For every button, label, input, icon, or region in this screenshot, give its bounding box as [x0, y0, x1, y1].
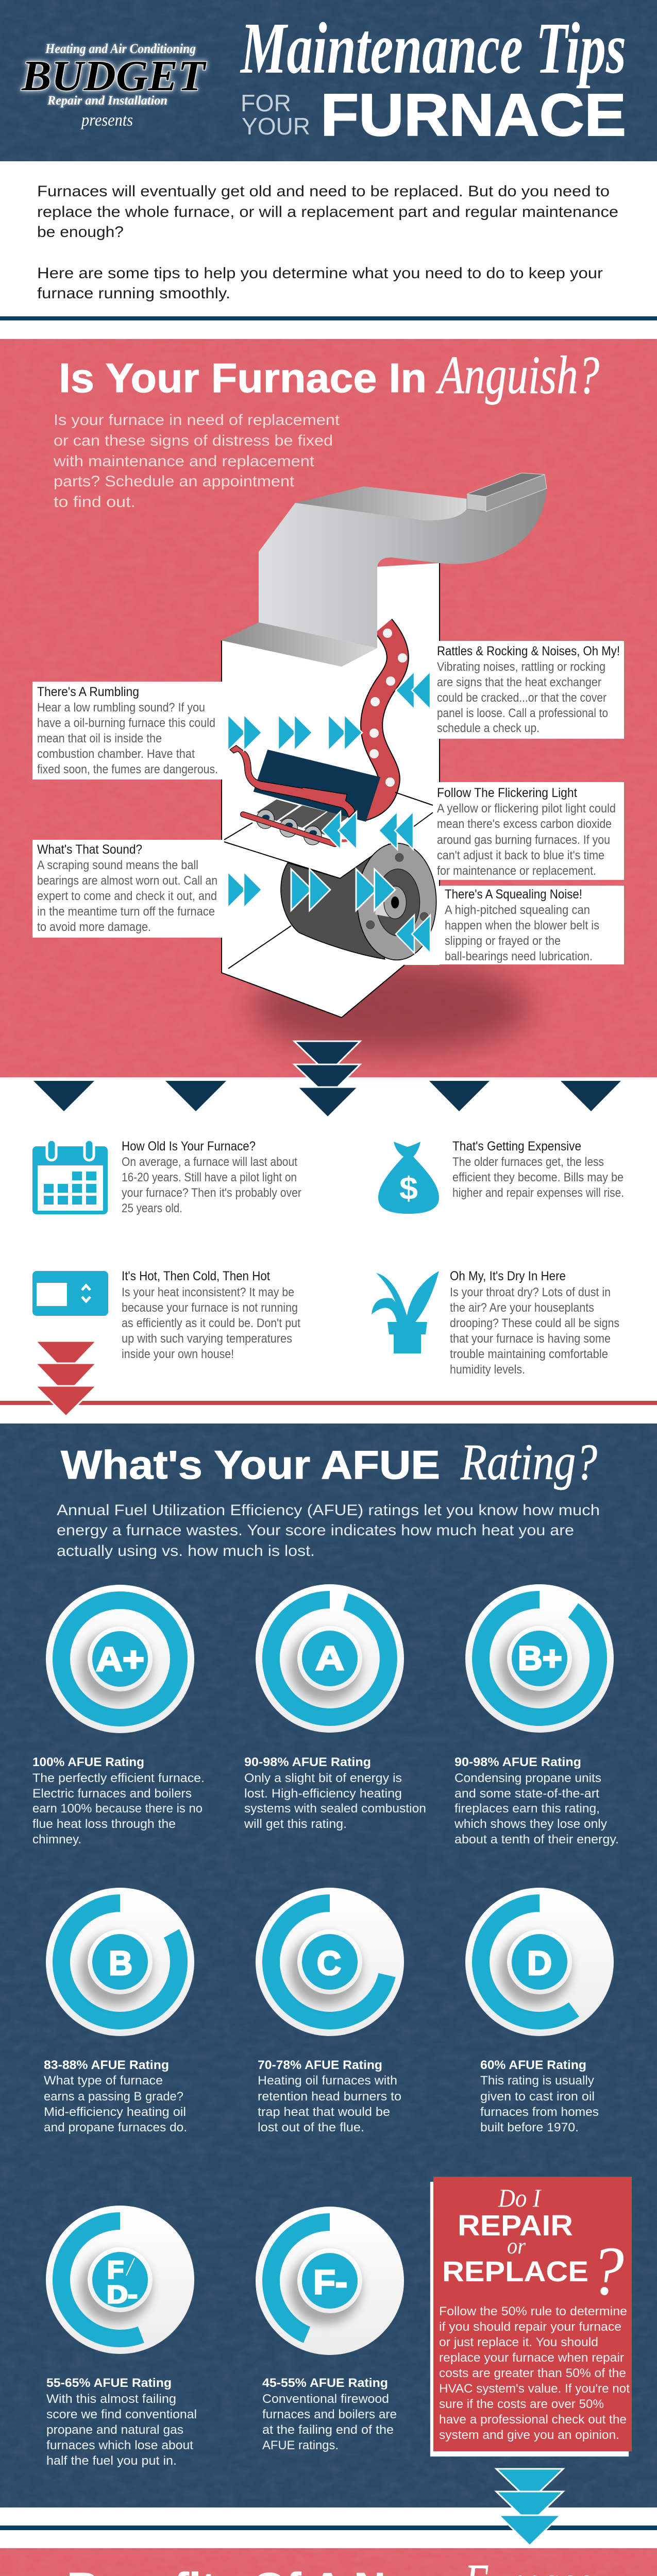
rating: 45-55: at the failing end of the	[262, 2423, 394, 2437]
rating: 100%: Electric furnaces and boilers	[32, 1787, 192, 1801]
callout heading: REPAIR	[458, 2209, 573, 2242]
title: YOUR	[242, 113, 310, 140]
rating: 70-78: trap heat that would be	[258, 2105, 390, 2119]
rating: 60: built before 1970.	[480, 2121, 579, 2134]
callout: rattles and rocking: Vibrating noises, rattling or rocking	[437, 660, 605, 674]
callout body: HVAC system's value. If you're not	[439, 2382, 630, 2396]
rating: 90-98 A: lost. High-efficiency heating	[244, 1787, 402, 1801]
icon: money bag: $	[399, 1171, 418, 1207]
rating: 45-55: AFUE ratings.	[262, 2438, 339, 2452]
arrows: diagram pointers	[228, 671, 430, 953]
rating: 55-65: furnaces which lose about	[46, 2438, 193, 2452]
callout: rattles and rocking: are signs that the heat exchanger	[437, 675, 601, 689]
icon: drooping plant	[372, 1271, 439, 1353]
intro text: furnace running smoothly.	[37, 285, 230, 302]
logo: Budget: Repair and Installation	[47, 94, 167, 108]
callout: rattles and rocking: panel is loose. Call a professional to	[437, 706, 608, 720]
arrow: centre triple chevron	[294, 1041, 360, 1117]
rating: 90-98 A: Only a slight bit of energy is	[244, 1771, 402, 1785]
callout: flickering light: for maintenance or replacement.	[437, 864, 596, 878]
rating: 83-88: earns a passing B grade?	[44, 2090, 183, 2104]
rating: 90-98 B+	[454, 1755, 619, 1846]
rating: 90-98 A: will get this rating.	[244, 1817, 347, 1831]
intro text: Here are some tips to help you determine what you need to do to keep your	[37, 265, 603, 282]
icon: money bag	[378, 1142, 439, 1214]
callout: squealing noise: slipping or frayed or the	[445, 934, 561, 948]
text: hot then cold	[122, 1269, 300, 1361]
arrows: top row navy triangles	[33, 1081, 621, 1111]
rating: 83-88: and propane furnaces do.	[44, 2121, 187, 2134]
gauge: B+: B+	[518, 1639, 562, 1677]
callout: rattles and rocking: schedule a check up.	[437, 721, 540, 735]
gauge: F/D-: F	[107, 2257, 124, 2284]
callout: what's that sound: in the meantime turn off the furnace	[37, 905, 215, 919]
rating: 60: This rating is usually	[480, 2074, 594, 2088]
icon: thermostat	[32, 1271, 108, 1316]
text: how old: On average, a furnace will last about	[122, 1155, 297, 1169]
furnace diagram	[221, 473, 547, 1054]
gauge: C: C	[317, 1944, 341, 1982]
text: expensive: higher and repair expenses will rise.	[452, 1186, 624, 1200]
heading: benefits	[67, 2553, 593, 2576]
text: expensive: The older furnaces get, the less	[452, 1155, 604, 1169]
callout: repair or replace	[430, 2177, 632, 2456]
callout: rattles and rocking	[434, 641, 624, 739]
callout heading	[442, 2183, 624, 2310]
text: dry in here: that your furnace is having some	[450, 1332, 611, 1346]
text: dry in here: humidity levels.	[450, 1363, 525, 1377]
callout: what's that sound: bearings are almost worn out. Call an	[37, 874, 217, 888]
callout: squealing noise: ball-bearings need lubrication.	[445, 950, 593, 963]
logo: Budget	[21, 41, 207, 130]
text: expensive: efficient they become. Bills may be	[452, 1171, 624, 1184]
rating: 90-98 A	[244, 1755, 426, 1831]
rating: 100%: 100% AFUE Rating	[32, 1755, 144, 1769]
red duct pipe with dots	[363, 626, 407, 810]
intro text: replace the whole furnace, or will a replacement part and regular maintenance	[37, 204, 618, 221]
rating: 55-65: half the fuel you put in.	[46, 2454, 177, 2468]
text: dry in here	[450, 1269, 619, 1377]
rating: 45-55: Conventional firewood	[262, 2392, 389, 2406]
rating: 70-78: retention head burners to	[258, 2090, 401, 2104]
gauge: B: B	[109, 1944, 132, 1982]
callout: rattles and rocking: Rattles & Rocking & Noises, Oh My!	[437, 644, 620, 658]
rating: 55-65: score we find conventional	[46, 2408, 197, 2421]
gauge: F-	[256, 2207, 404, 2355]
title: FOR	[241, 90, 291, 116]
rating: 55-65: 55-65% AFUE Rating	[46, 2376, 172, 2390]
arrow: teal triple chevron	[496, 2469, 563, 2546]
rating: 45-55: furnaces and boilers are	[262, 2408, 397, 2421]
callout: rumbling: mean that oil is inside the	[37, 732, 162, 745]
text: how old: How Old Is Your Furnace?	[122, 1139, 256, 1154]
rating: 90-98 B+: 90-98% AFUE Rating	[454, 1755, 581, 1769]
text: hot then cold: as efficiently as it could be. Don't put	[122, 1316, 300, 1330]
blower motor	[281, 843, 436, 960]
text: hot then cold: Is your heat inconsistent? It may be	[122, 1285, 294, 1299]
panel: is your furnace in anguish	[0, 339, 657, 1077]
rating: 100%	[32, 1755, 205, 1846]
callout: flickering light: A yellow or flickering pilot light could	[437, 802, 616, 816]
rating: 90-98 B+: fireplaces earn this rating,	[454, 1802, 600, 1816]
heading: anguish	[59, 345, 599, 405]
AFUE intro text: Annual Fuel Utilization Efficiency (AFUE) ratings let you know how much	[57, 1502, 600, 1519]
callout body: costs are greater than 50% of the	[439, 2366, 626, 2380]
callout heading: ?	[591, 2233, 624, 2310]
callout: flickering light: Follow The Flickering Light	[437, 786, 577, 800]
text: expensive	[452, 1139, 624, 1200]
rating: 60	[480, 2058, 599, 2134]
text: how old	[122, 1139, 301, 1215]
rating: 83-88	[44, 2058, 187, 2134]
heading: AFUE: Rating?	[460, 1433, 597, 1490]
callout body: replace your furnace when repair	[439, 2351, 624, 2365]
rating: 55-65: With this almost failing	[46, 2392, 176, 2406]
title: FURNACE	[321, 81, 626, 148]
callout heading: REPLACE	[442, 2255, 588, 2287]
anguish intro text: or can these signs of distress be fixed	[54, 432, 333, 449]
text: dry in here: drooping? These could all be signs	[450, 1316, 619, 1330]
callout: rumbling: combustion chamber. Have that	[37, 747, 195, 761]
callout body: have a professional check out the	[439, 2413, 627, 2427]
rating: 100%: chimney.	[32, 1833, 81, 1846]
gauge: F/D-	[46, 2206, 194, 2354]
text: dry in here: the air? Are your houseplants	[450, 1301, 594, 1315]
callout body: if you should repair your furnace	[439, 2320, 621, 2334]
text: how old: 25 years old.	[122, 1201, 182, 1215]
rating: 70-78	[258, 2058, 401, 2134]
callout: rattles and rocking: could be cracked...or that the cover	[437, 691, 607, 705]
rating: 55-65: propane and natural gas	[46, 2423, 183, 2437]
callout: rumbling: There's A Rumbling	[37, 685, 139, 699]
rating: 60: 60% AFUE Rating	[480, 2058, 586, 2072]
gauge: A+: A+	[96, 1640, 144, 1678]
heat exchanger and burners	[230, 745, 380, 845]
rating: 90-98 B+: which shows they lose only	[454, 1817, 607, 1831]
intro text	[37, 183, 618, 302]
callout: rumbling: fixed soon, the fumes are dangerous.	[37, 762, 218, 776]
rating: 90-98 A: 90-98% AFUE Rating	[244, 1755, 371, 1769]
heading: anguish: Anguish?	[435, 345, 599, 405]
callout: flickering light: mean there's excess carbon dioxide	[437, 817, 612, 831]
logo: Budget: BUDGET	[21, 52, 207, 100]
callout: rumbling	[32, 682, 223, 779]
panel: AFUE rating	[0, 1423, 657, 2507]
gauge: C	[256, 1888, 404, 2036]
callout: squealing noise: A high-pitched squealing can	[445, 903, 590, 917]
callout body: sure if the costs are over 50%	[439, 2397, 604, 2411]
gauge: F/D-: D-	[107, 2281, 138, 2309]
rating: 70-78: 70-78% AFUE Rating	[258, 2058, 382, 2072]
gauge: B+	[465, 1584, 614, 1733]
text: dry in here: Is your throat dry? Lots of dust in	[450, 1285, 611, 1299]
rating: 70-78: Heating oil furnaces with	[258, 2074, 397, 2088]
rating: 100%: earn 100% because there is no	[32, 1802, 203, 1816]
arrow: red triple chevron	[36, 1341, 96, 1416]
rating: 70-78: lost out of the flue.	[258, 2121, 364, 2134]
text: hot then cold: up with such varying temperatures	[122, 1332, 292, 1346]
callout: what's that sound: What's That Sound?	[37, 842, 142, 857]
rating: 90-98 B+: Condensing propane units	[454, 1771, 601, 1785]
callout body: system and give you an opinion.	[439, 2428, 619, 2442]
gauge: A+	[46, 1585, 194, 1733]
panel: benefits	[0, 2548, 657, 2576]
callout: rumbling: Hear a low rumbling sound? If you	[37, 701, 205, 715]
gauge: A	[256, 1584, 404, 1733]
callout: what's that sound: to avoid more damage.	[37, 920, 151, 934]
text: expensive: That's Getting Expensive	[452, 1139, 581, 1154]
rating: 45-55	[262, 2376, 397, 2452]
callout: flickering light: around gas burning furnaces. If you	[437, 833, 610, 847]
callout: squealing noise	[440, 886, 624, 964]
AFUE intro text	[57, 1502, 600, 1560]
rating: 90-98 A: systems with sealed combustion	[244, 1802, 426, 1816]
rating: 90-98 B+: about a tenth of their energy.	[454, 1833, 619, 1846]
callout heading: or	[507, 2233, 526, 2259]
heading: AFUE	[61, 1433, 597, 1490]
callout: squealing noise: happen when the blower belt is	[445, 919, 599, 933]
anguish intro text: to find out.	[54, 494, 136, 511]
callout body	[439, 2304, 630, 2442]
text: hot then cold: because your furnace is not running	[122, 1301, 298, 1315]
callout: what's that sound	[32, 840, 223, 938]
anguish intro text: parts? Schedule an appointment	[54, 473, 295, 490]
icon: calendar	[32, 1140, 108, 1214]
callout body: or just replace it. You should	[439, 2335, 598, 2349]
intro text: Furnaces will eventually get old and need to be replaced. But do you need to	[37, 183, 610, 200]
callout: flickering light	[434, 782, 624, 880]
callout: what's that sound: A scraping sound means the ball	[37, 858, 198, 872]
callout heading: Do I	[498, 2183, 542, 2212]
anguish intro text: with maintenance and replacement	[53, 453, 315, 470]
heading: AFUE: What's Your AFUE	[61, 1442, 440, 1487]
text: how old: your furnace? Then it's probably over	[122, 1186, 301, 1200]
logo: Budget: presents	[80, 111, 133, 130]
logo: Budget: Heating and Air Conditioning	[45, 41, 196, 56]
text: hot then cold: It's Hot, Then Cold, Then Hot	[122, 1269, 270, 1283]
callout body: Follow the 50% rule to determine	[439, 2304, 627, 2318]
heading: anguish: Is Your Furnace In	[59, 355, 427, 401]
callout: what's that sound: expert to come and check it out, and	[37, 889, 217, 903]
gauge: D: D	[527, 1944, 552, 1982]
rating: 100%: The perfectly efficient furnace.	[32, 1771, 205, 1785]
text: how old: 16-20 years. Still have a pilot light on	[122, 1171, 297, 1184]
rating: 90-98 B+: and some state-of-the-art	[454, 1787, 599, 1801]
rating: 55-65	[46, 2376, 197, 2468]
callout: squealing noise: There's A Squealing Noise!	[445, 887, 582, 902]
air duct	[221, 473, 547, 667]
rating: 45-55: 45-55% AFUE Rating	[262, 2376, 388, 2390]
title	[240, 7, 626, 148]
gauge: F-: F-	[313, 2263, 347, 2301]
text: hot then cold: inside your own house!	[122, 1347, 234, 1361]
anguish intro text	[53, 412, 340, 511]
anguish intro text: Is your furnace in need of replacement	[54, 412, 340, 429]
rating: 83-88: What type of furnace	[44, 2074, 163, 2088]
text: dry in here: Oh My, It's Dry In Here	[450, 1269, 566, 1283]
text: dry in here: trouble maintaining comfortable	[450, 1347, 608, 1361]
intro text: be enough?	[37, 224, 124, 241]
rating: 83-88: 83-88% AFUE Rating	[44, 2058, 169, 2072]
panel: header	[0, 0, 657, 161]
rating: 100%: flue heat loss through the	[32, 1817, 176, 1831]
AFUE intro text: energy a furnace wastes. Your score indicates how much heat you are	[57, 1522, 574, 1539]
gauge: B	[46, 1888, 194, 2036]
panel: warning signs	[32, 1139, 624, 1377]
gauge: A: A	[315, 1639, 344, 1677]
callout: flickering light: can't adjust it back to blue it's time	[437, 849, 604, 862]
callout: rumbling: have a oil-burning furnace this could	[37, 716, 215, 730]
rating: 83-88: Mid-efficiency heating oil	[44, 2105, 186, 2119]
gauge: D	[465, 1888, 614, 2036]
AFUE intro text: actually using vs. how much is lost.	[57, 1543, 315, 1560]
rating: 60: furnaces from homes	[480, 2105, 599, 2119]
rating: 60: given to cast iron oil	[480, 2090, 595, 2104]
